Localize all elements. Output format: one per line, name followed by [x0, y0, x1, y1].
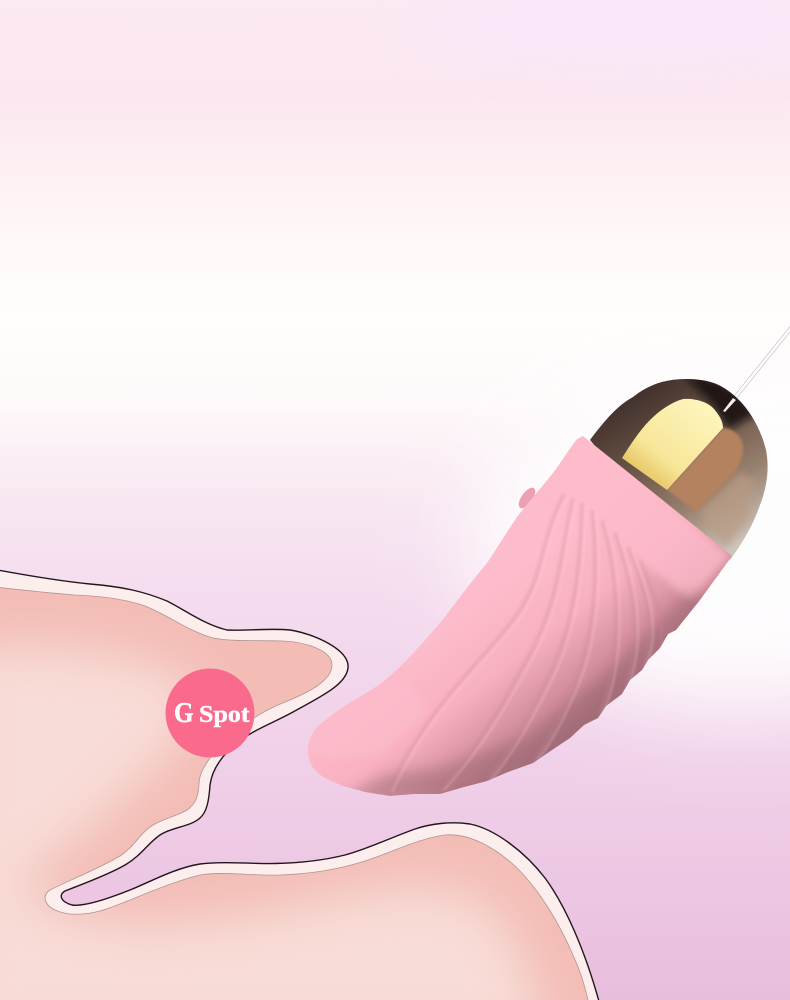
G Spot marker: G [174, 698, 194, 729]
product: transparent capsule head [590, 376, 768, 560]
G Spot marker: Spot [199, 702, 250, 728]
inner contour line [0, 587, 589, 1000]
internal gold battery [622, 399, 723, 490]
product: pink silicone body [305, 436, 732, 800]
anatomy cross-section diagram [0, 560, 615, 1000]
product: wire [725, 323, 790, 410]
fan of ribs: highlights [392, 576, 654, 792]
collar highlight and edge shading [351, 446, 730, 796]
wire entry point [723, 398, 736, 412]
fan of ribs: broad soft facets [402, 494, 649, 764]
outer contour line [0, 570, 600, 1000]
G Spot marker [166, 668, 254, 758]
tissue fill with soft shading [0, 588, 588, 1000]
internal brown motor [667, 428, 743, 512]
product: side button [516, 485, 538, 511]
dark top corner of capsule [685, 376, 756, 548]
tissue wall band [0, 570, 600, 1000]
